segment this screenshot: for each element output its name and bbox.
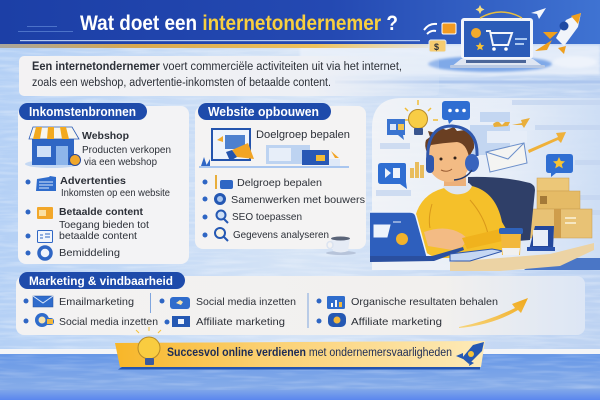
icon: banner bulb — [136, 327, 161, 365]
heading pill: Inkomstenbronnen — [29, 105, 136, 119]
item: Advertenties: Advertenties — [60, 175, 126, 187]
heading pill: Website opbouwen — [208, 105, 319, 119]
item: Affiliate marketing middle — [164, 316, 285, 328]
heading pill: Marketing & vindbaarheid — [29, 274, 173, 288]
text: Webshop: via een webshop — [84, 156, 157, 168]
item: Advertenties — [26, 175, 170, 199]
item: Samenwerken met bouwers: Samenwerken met bouwers — [231, 194, 365, 206]
item: Social media inzetten bottom: Social media inzetten — [59, 316, 158, 328]
item: Social media inzetten top — [160, 296, 296, 309]
panel: right illustration — [370, 98, 600, 271]
header illustration: laptop, rocket and icons — [424, 5, 597, 72]
item: Organische resultaten behalen: Organische resultaten behalen — [351, 296, 498, 308]
item: Gegevens analyseren — [202, 228, 329, 241]
panel: intro: Een internetondernemer voert commerciële activiteiten uit via het internet, — [32, 61, 402, 73]
panel: intro: zoals een webshop, advertentie-inkomsten of betaalde content. — [32, 77, 331, 89]
banner text: Succesvol online verdienen met ondernemersvaarligheden — [167, 347, 452, 359]
icon: light bulb — [403, 100, 438, 135]
item: Betaalde content: betaalde content — [59, 230, 137, 242]
icon: stacked boxes — [530, 178, 592, 238]
laptop — [370, 212, 464, 262]
text: Doelgroep bepalen: Doelgroep bepalen — [256, 129, 350, 141]
arrow: yellow arrows — [493, 118, 566, 153]
item: SEO toepassen: SEO toepassen — [232, 211, 302, 223]
icon: star bubble — [546, 154, 573, 177]
icon: envelope — [486, 143, 527, 172]
icon: small bar chart — [410, 162, 424, 178]
banner — [115, 327, 485, 370]
icon: banner rocket — [456, 342, 484, 366]
tablet — [527, 226, 555, 251]
icon: video chat bubble — [378, 163, 407, 189]
item: Bemiddeling — [26, 247, 120, 259]
text: Webshop: Producten verkopen — [82, 144, 171, 156]
arrow: growth — [459, 298, 528, 328]
item: Social media inzetten top: Social media inzetten — [196, 296, 296, 308]
header illustration: laptop, rocket and icons: $ — [434, 42, 439, 52]
icon: store — [25, 127, 80, 168]
illustration: website and megaphone — [199, 128, 349, 168]
item: Betaalde content: Betaalde content — [59, 207, 144, 218]
panel: Inkomstenbronnen — [18, 103, 189, 264]
item: Emailmarketing — [24, 296, 134, 308]
item: SEO toepassen — [202, 210, 302, 223]
coffee mug — [499, 228, 523, 255]
notebook on desk — [450, 249, 503, 261]
icon: web windows — [470, 112, 527, 155]
item: Bemiddeling: Bemiddeling — [59, 247, 120, 259]
text: Webshop — [82, 130, 171, 168]
panel: Website opbouwen — [195, 103, 366, 249]
item: Emailmarketing: Emailmarketing — [59, 296, 134, 308]
desk — [450, 243, 594, 271]
item: Affiliate marketing right — [316, 313, 442, 328]
header band — [0, 0, 600, 48]
icon: media chat bubble — [387, 119, 405, 140]
divider — [150, 293, 151, 313]
item: Affiliate marketing right: Affiliate marketing — [351, 316, 442, 328]
coffee cup on the saucer — [326, 236, 356, 255]
item: Social media inzetten bottom — [24, 313, 158, 328]
panel: intro — [19, 56, 439, 96]
item: Delgroep bepalen — [202, 175, 322, 189]
item: Gegevens analyseren: Gegevens analyseren — [233, 229, 329, 241]
chair — [468, 177, 535, 245]
item: Betaalde content — [26, 207, 149, 242]
item: Advertenties: Inkomsten op een website — [61, 188, 170, 199]
title: Wat doet een internetondernemer ? — [80, 12, 398, 35]
item: Affiliate marketing middle: Affiliate marketing — [196, 316, 285, 328]
divider — [308, 293, 309, 328]
item: Betaalde content: Toegang bieden tot — [59, 219, 149, 231]
icon: chat bubble with dots — [442, 101, 470, 124]
person — [414, 126, 516, 258]
panel: Marketing & vindbaarheid — [16, 272, 585, 335]
item: Delgroep bepalen: Delgroep bepalen — [237, 177, 322, 189]
text: Webshop: Webshop — [82, 130, 129, 142]
